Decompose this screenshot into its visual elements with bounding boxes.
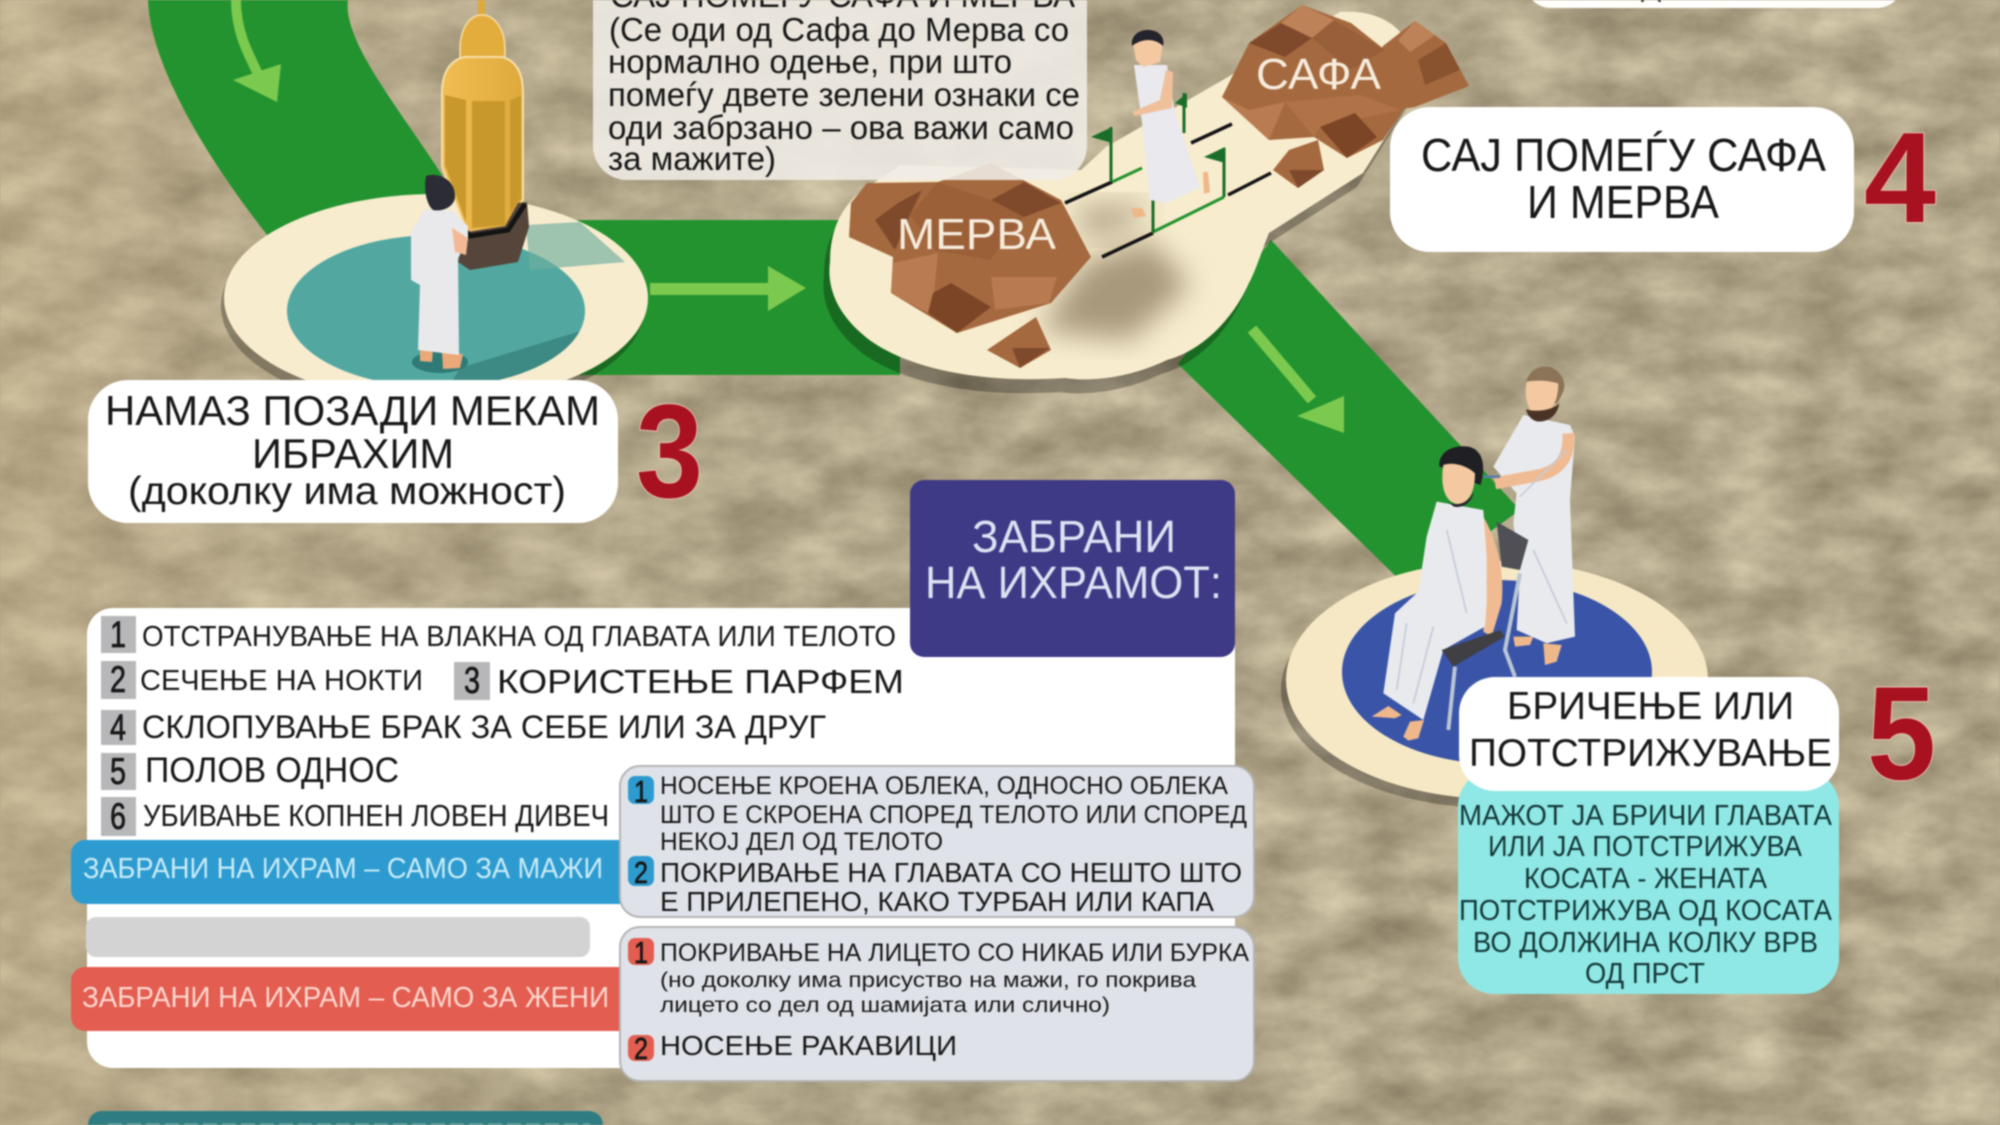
text block: step 5 explanation: ПОТСТРИЖУВА ОД КОСАТА: [1459, 895, 1833, 927]
label: step 5 title: [1459, 677, 1839, 791]
icon: Maqam Ibrahim golden monument: [442, 0, 529, 270]
label: step 3 title: (доколку има можност): [128, 470, 566, 513]
panel: Ihram prohibitions list: [86, 608, 1235, 1068]
bar: women only prohibitions: ЗАБРАНИ НА ИХРАМ – САМО ЗА ЖЕНИ: [82, 982, 609, 1014]
panel: women only list: 2: [634, 1031, 648, 1066]
prohibition 2: 2: [110, 659, 126, 700]
prohibition 6: 6: [110, 796, 126, 837]
number: step 3: 3: [636, 378, 703, 526]
bar: men only prohibitions: [71, 840, 641, 904]
disc: step 3 platform: [220, 193, 649, 381]
label: step 4 title: И МЕРВА: [1527, 176, 1719, 228]
prohibition 3: КОРИСТЕЊЕ ПАРФЕМ: [497, 663, 904, 700]
label: step 4 title: [1390, 107, 1854, 252]
panel: women only list: лицето со дел од шамијата или слично): [660, 994, 1110, 1017]
heading: prohibitions of Ihram: [910, 480, 1235, 657]
panel: men only list: НЕКОЈ ДЕЛ ОД ТЕЛОТО: [660, 828, 943, 856]
icon: pilgrim praying behind the Maqam: [411, 175, 468, 373]
text block: step 5 explanation: [1458, 770, 1839, 994]
icon: seated pilgrim on chair: [1372, 446, 1528, 741]
panel: men only list: Е ПРИЛЕПЕНО, КАКО ТУРБАН ИЛИ КАПА: [660, 886, 1214, 917]
bar: next section heading, cropped at the bottom edge: [88, 1111, 603, 1125]
prohibition 6: УБИВАЊЕ КОПНЕН ЛОВЕН ДИВЕЧ: [143, 798, 609, 833]
text block: Sa'y description: помеѓу двете зелени ознаки се: [608, 76, 1080, 113]
bar: men only prohibitions: ЗАБРАНИ НА ИХРАМ – САМО ЗА МАЖИ: [83, 853, 603, 885]
panel: men only list: ШТО Е СКРОЕНА СПОРЕД ТЕЛОТО ИЛИ СПОРЕД: [660, 801, 1247, 829]
prohibition 5: 5: [110, 751, 126, 792]
label: step 3 title: НАМАЗ ПОЗАДИ МЕКАМ: [105, 387, 600, 434]
prohibition 1: 1: [110, 614, 126, 655]
prohibition 3: 3: [464, 660, 480, 701]
disc: steps Safa and Marwa platform: [823, 12, 1415, 393]
text block: step 5 explanation: ВО ДОЛЖИНА КОЛКУ ВРВ: [1473, 927, 1818, 959]
panel: women only list: ПОКРИВАЊЕ НА ЛИЦЕТО СО НИКАБ ИЛИ БУРКА: [660, 939, 1249, 967]
label: step 4 title: САЈ ПОМЕЃУ САФА: [1421, 129, 1826, 181]
prohibition 4: СКЛОПУВАЊЕ БРАК ЗА СЕБЕ ИЛИ ЗА ДРУГ: [142, 709, 826, 745]
panel: women only list: 1: [634, 935, 648, 970]
arrow: diagonal arrow to step 5: [1252, 329, 1344, 433]
label: Marwa: МЕРВА: [897, 210, 1057, 259]
panel: women only list: [620, 927, 1254, 1081]
label: step 5 title: ПОТСТРИЖУВАЊЕ: [1469, 732, 1832, 775]
text block: Sa'y description: оди забрзано – ова важи само: [608, 109, 1074, 146]
text block: step 5 explanation: ОД ПРСТ: [1585, 958, 1705, 990]
panel: men only list: 2: [634, 855, 648, 890]
icon: rock pile Safa: [1222, 5, 1469, 188]
number: step 4: 4: [1864, 106, 1936, 250]
prohibition 1: ОТСТРАНУВАЊЕ НА ВЛАКНА ОД ГЛАВАТА ИЛИ ТЕЛОТО: [142, 621, 896, 653]
bar: women only prohibitions: [71, 967, 641, 1031]
panel: men only list: НОСЕЊЕ КРОЕНА ОБЛЕКА, ОДНОСНО ОБЛЕКА: [660, 772, 1228, 800]
text block: step 5 explanation: ИЛИ ЈА ПОТСТРИЖУВА: [1488, 831, 1803, 863]
panel: men only list: 1: [634, 774, 648, 809]
panel: women only list: НОСЕЊЕ РАКАВИЦИ: [660, 1030, 957, 1061]
text block: Sa'y description: (Се оди од Сафа до Мерва со: [609, 11, 1069, 48]
label: step 3 title: [88, 380, 618, 523]
label: Safa: САФА: [1256, 50, 1382, 99]
icon: standing barber: [1493, 366, 1575, 665]
green path: road from step 3 to step 4: [560, 220, 900, 375]
arrow: right arrow to step 4: [650, 266, 806, 311]
green path: road from step 4 to step 5: [1178, 240, 1520, 590]
icon: Sa'y lane lines and green flags: [1065, 93, 1271, 257]
number: step 5: 5: [1867, 660, 1936, 808]
prohibition 4: 4: [110, 707, 126, 748]
disc: step 5 platform: [1281, 561, 1708, 808]
heading: prohibitions of Ihram: ЗАБРАНИ: [972, 511, 1176, 562]
icon: pilgrim walking between Safa and Marwa: [1131, 30, 1210, 218]
text block: step 5 explanation: КОСАТА - ЖЕНАТА: [1524, 863, 1768, 895]
label: top step heading box: [1525, 0, 1903, 8]
prohibition 2: [101, 659, 423, 700]
panel: men only list: ПОКРИВАЊЕ НА ГЛАВАТА СО НЕШТО ШТО: [660, 857, 1242, 888]
label: step 5 title: БРИЧЕЊЕ ИЛИ: [1507, 685, 1794, 728]
panel: women only list: (но доколку има присуство на мажи, го покрива: [660, 969, 1196, 992]
text block: Sa'y description: [593, 0, 1087, 180]
prohibition 5: ПОЛОВ ОДНОС: [145, 751, 399, 790]
text block: Sa'y description: нормално одење, при што: [608, 43, 1012, 80]
text block: Sa'y description: за мажите): [608, 140, 776, 177]
green path: upper road to step 3: [148, 0, 470, 330]
heading: prohibitions of Ihram: НА ИХРАМОТ:: [925, 557, 1222, 608]
panel: men only list: [620, 766, 1254, 917]
label: step 3 title: ИБРАХИМ: [252, 430, 454, 477]
divider bar: grey: [86, 917, 590, 957]
text block: step 5 explanation: МАЖОТ ЈА БРИЧИ ГЛАВАТА: [1459, 800, 1833, 832]
icon: rock pile Marwa: [849, 163, 1091, 368]
prohibition 2: СЕЧЕЊЕ НА НОКТИ: [140, 665, 423, 697]
arrow: curved arrow on upper road: [233, 0, 281, 102]
